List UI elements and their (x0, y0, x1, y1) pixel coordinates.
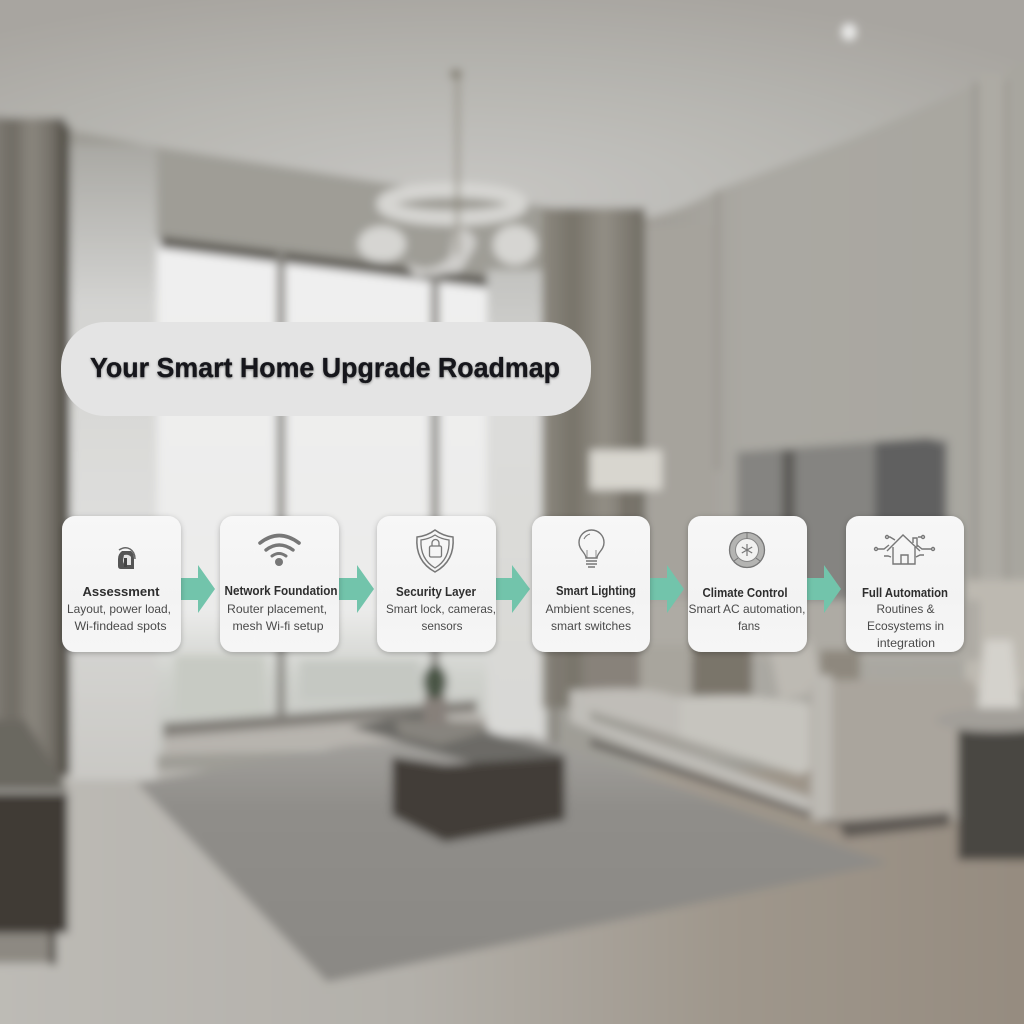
icon: smart home (874, 535, 934, 564)
icon: assessment (118, 548, 135, 569)
icon: wifi (260, 536, 299, 566)
card: Smart Lighting (532, 516, 650, 652)
card: Climate Control (688, 516, 807, 652)
heading: Security Layer (396, 585, 476, 599)
description (867, 602, 944, 650)
arrow 5 (806, 565, 841, 613)
title text: Your Smart Home Upgrade Roadmap (90, 352, 560, 383)
description (546, 602, 634, 633)
description (688, 602, 806, 633)
arrow 2 (339, 565, 374, 613)
icon: shield (417, 530, 453, 572)
description: Wi-findead spots (74, 619, 166, 633)
description: integration (877, 636, 935, 650)
heading: Assessment (82, 585, 160, 599)
description: smart switches (551, 619, 631, 633)
description: mesh Wi-fi setup (232, 619, 324, 633)
description: sensors (422, 619, 462, 633)
card: Assessment (62, 516, 181, 652)
heading: Network Foundation (224, 584, 338, 598)
arrow 1 (180, 565, 215, 613)
description (227, 602, 327, 633)
arrow 3 (495, 565, 530, 613)
title pill (61, 322, 591, 416)
description: Ecosystems in (867, 619, 944, 633)
description (67, 602, 171, 633)
arrow 4 (650, 565, 684, 613)
card: Security Layer (377, 516, 496, 652)
card: Network Foundation (220, 516, 339, 652)
description (386, 602, 496, 633)
heading: Climate Control (702, 586, 788, 600)
icon: climate dial (730, 532, 764, 568)
description: Layout, power load, (67, 602, 171, 616)
description: Router placement, (227, 602, 327, 616)
heading: Smart Lighting (556, 584, 636, 598)
description: Smart lock, cameras, (386, 602, 496, 616)
description: Ambient scenes, (546, 602, 634, 616)
description: fans (738, 619, 760, 633)
description: Smart AC automation, (688, 602, 806, 616)
card: Full Automation (846, 516, 964, 652)
description: Routines & (876, 602, 934, 616)
icon: light bulb (579, 530, 604, 567)
heading: Full Automation (862, 586, 948, 600)
